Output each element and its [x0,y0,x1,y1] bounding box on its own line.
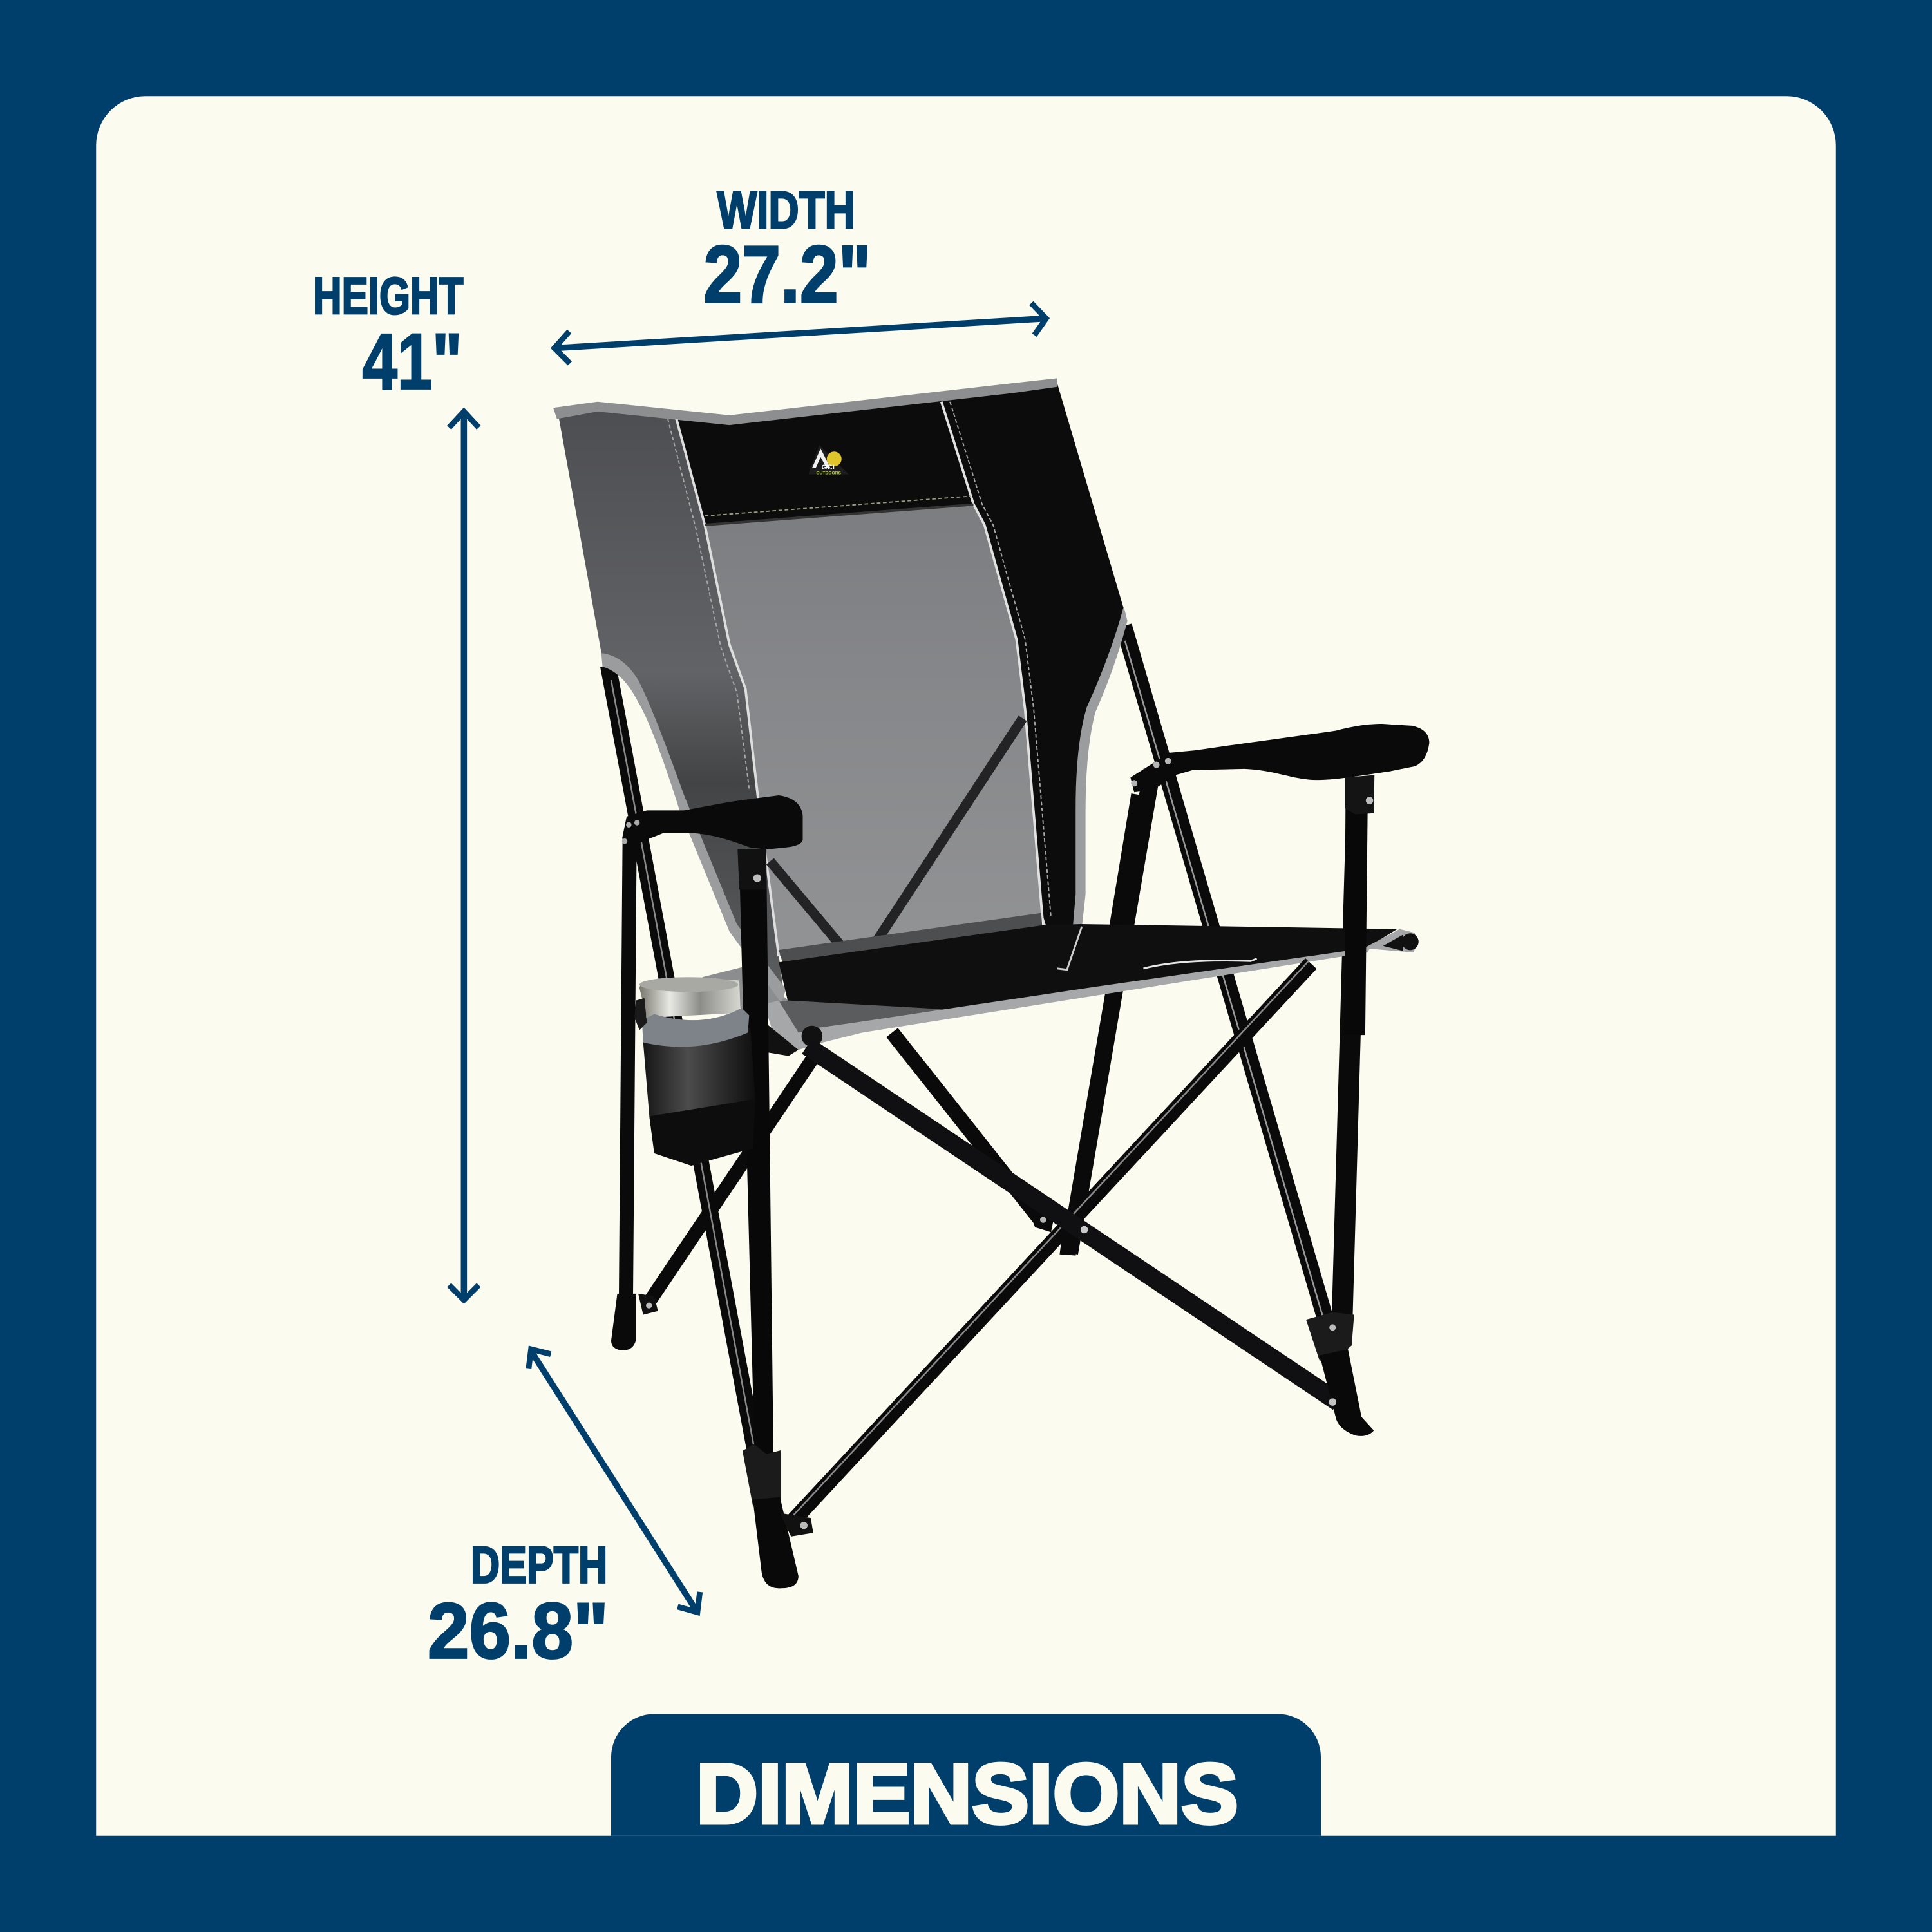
top binding [553,378,1057,425]
logo: GCI [822,464,835,471]
label: width [703,181,871,320]
right arm post [1344,807,1368,1035]
seat: piping at back join [1057,927,1082,970]
back canvas: mesh centre [705,504,1043,956]
front left foot [743,1444,813,1588]
label: height [313,267,463,406]
seat: lower back band [779,913,1043,966]
seat end cap left [802,1026,822,1046]
seat: front binding [764,947,1370,1050]
tab: dimensions: DIMENSIONS [696,1746,1238,1841]
front right foot [1306,1312,1374,1436]
arrow: height [449,412,478,1300]
seat: grey front fold [764,1001,943,1047]
seat: right end shadow [1383,935,1403,951]
seat rear grey behind cup [703,966,788,1013]
rear foot left [611,1294,636,1350]
label: depth: DEPTH [471,1537,607,1595]
seat: white piping [1144,959,1257,969]
label: width: 27.2" [703,229,871,320]
back canvas: right black panel [942,383,1124,969]
left curved binding [601,653,786,1003]
tab: dimensions [611,1714,1321,1841]
label: height: 41" [362,317,462,406]
logo: OUTDOORS [816,471,842,476]
rear lower bracket [638,1294,658,1314]
seat: black fabric [779,924,1397,1025]
front left post [739,862,774,1484]
white piping and stitching [668,402,1057,969]
bolt: X centre [1081,1226,1088,1233]
arrow: depth [529,1349,700,1613]
cup holder with tumbler [634,977,755,1166]
rear pivot bracket [1029,1210,1078,1256]
right armrest [1130,724,1429,815]
label: depth: 26.8" [428,1586,609,1674]
label: height: HEIGHT [313,267,463,325]
right curved binding [1072,606,1128,939]
back canvas: left grey panel [558,409,784,992]
back straps [770,718,1023,945]
chair [553,378,1429,1588]
left armrest [622,795,802,889]
label: width: WIDTH [717,181,855,240]
big X crossbar [788,961,1338,1523]
rear frame tubes [608,626,1357,1466]
seat: right end fold [1363,929,1418,952]
seat end cap right [1402,933,1419,950]
bolt: rear cross [1040,1217,1046,1223]
label: depth [428,1537,609,1674]
back canvas: black header [676,399,973,525]
under-seat shadow [765,1023,799,1056]
arrow: width [554,303,1046,363]
logo [808,445,849,476]
